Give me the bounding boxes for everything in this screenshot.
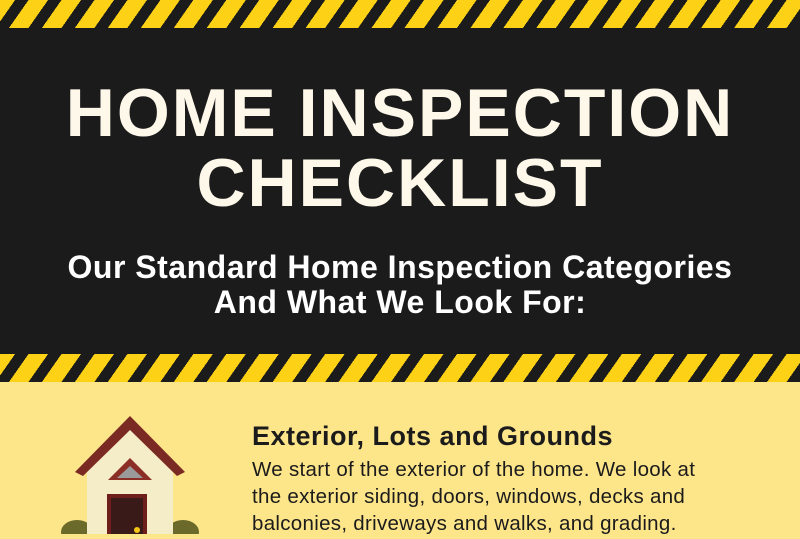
top hazard stripes [0, 0, 800, 28]
subtitle: And What We Look For: [214, 284, 586, 320]
bottom hazard stripes [0, 354, 800, 382]
icon: house [61, 416, 199, 534]
title: CHECKLIST [196, 145, 604, 221]
section text [252, 458, 695, 535]
section text: the exterior siding, doors, windows, decks and [252, 485, 685, 508]
subtitle: Our Standard Home Inspection Categories [68, 249, 732, 285]
title [66, 75, 734, 221]
section text: balconies, driveways and walks, and grading. [252, 512, 677, 535]
section text: We start of the exterior of the home. We look at [252, 458, 695, 481]
section heading: Exterior, Lots and Grounds [252, 421, 613, 451]
panel: header [0, 0, 800, 382]
title: HOME INSPECTION [66, 75, 734, 151]
subtitle [68, 249, 732, 320]
